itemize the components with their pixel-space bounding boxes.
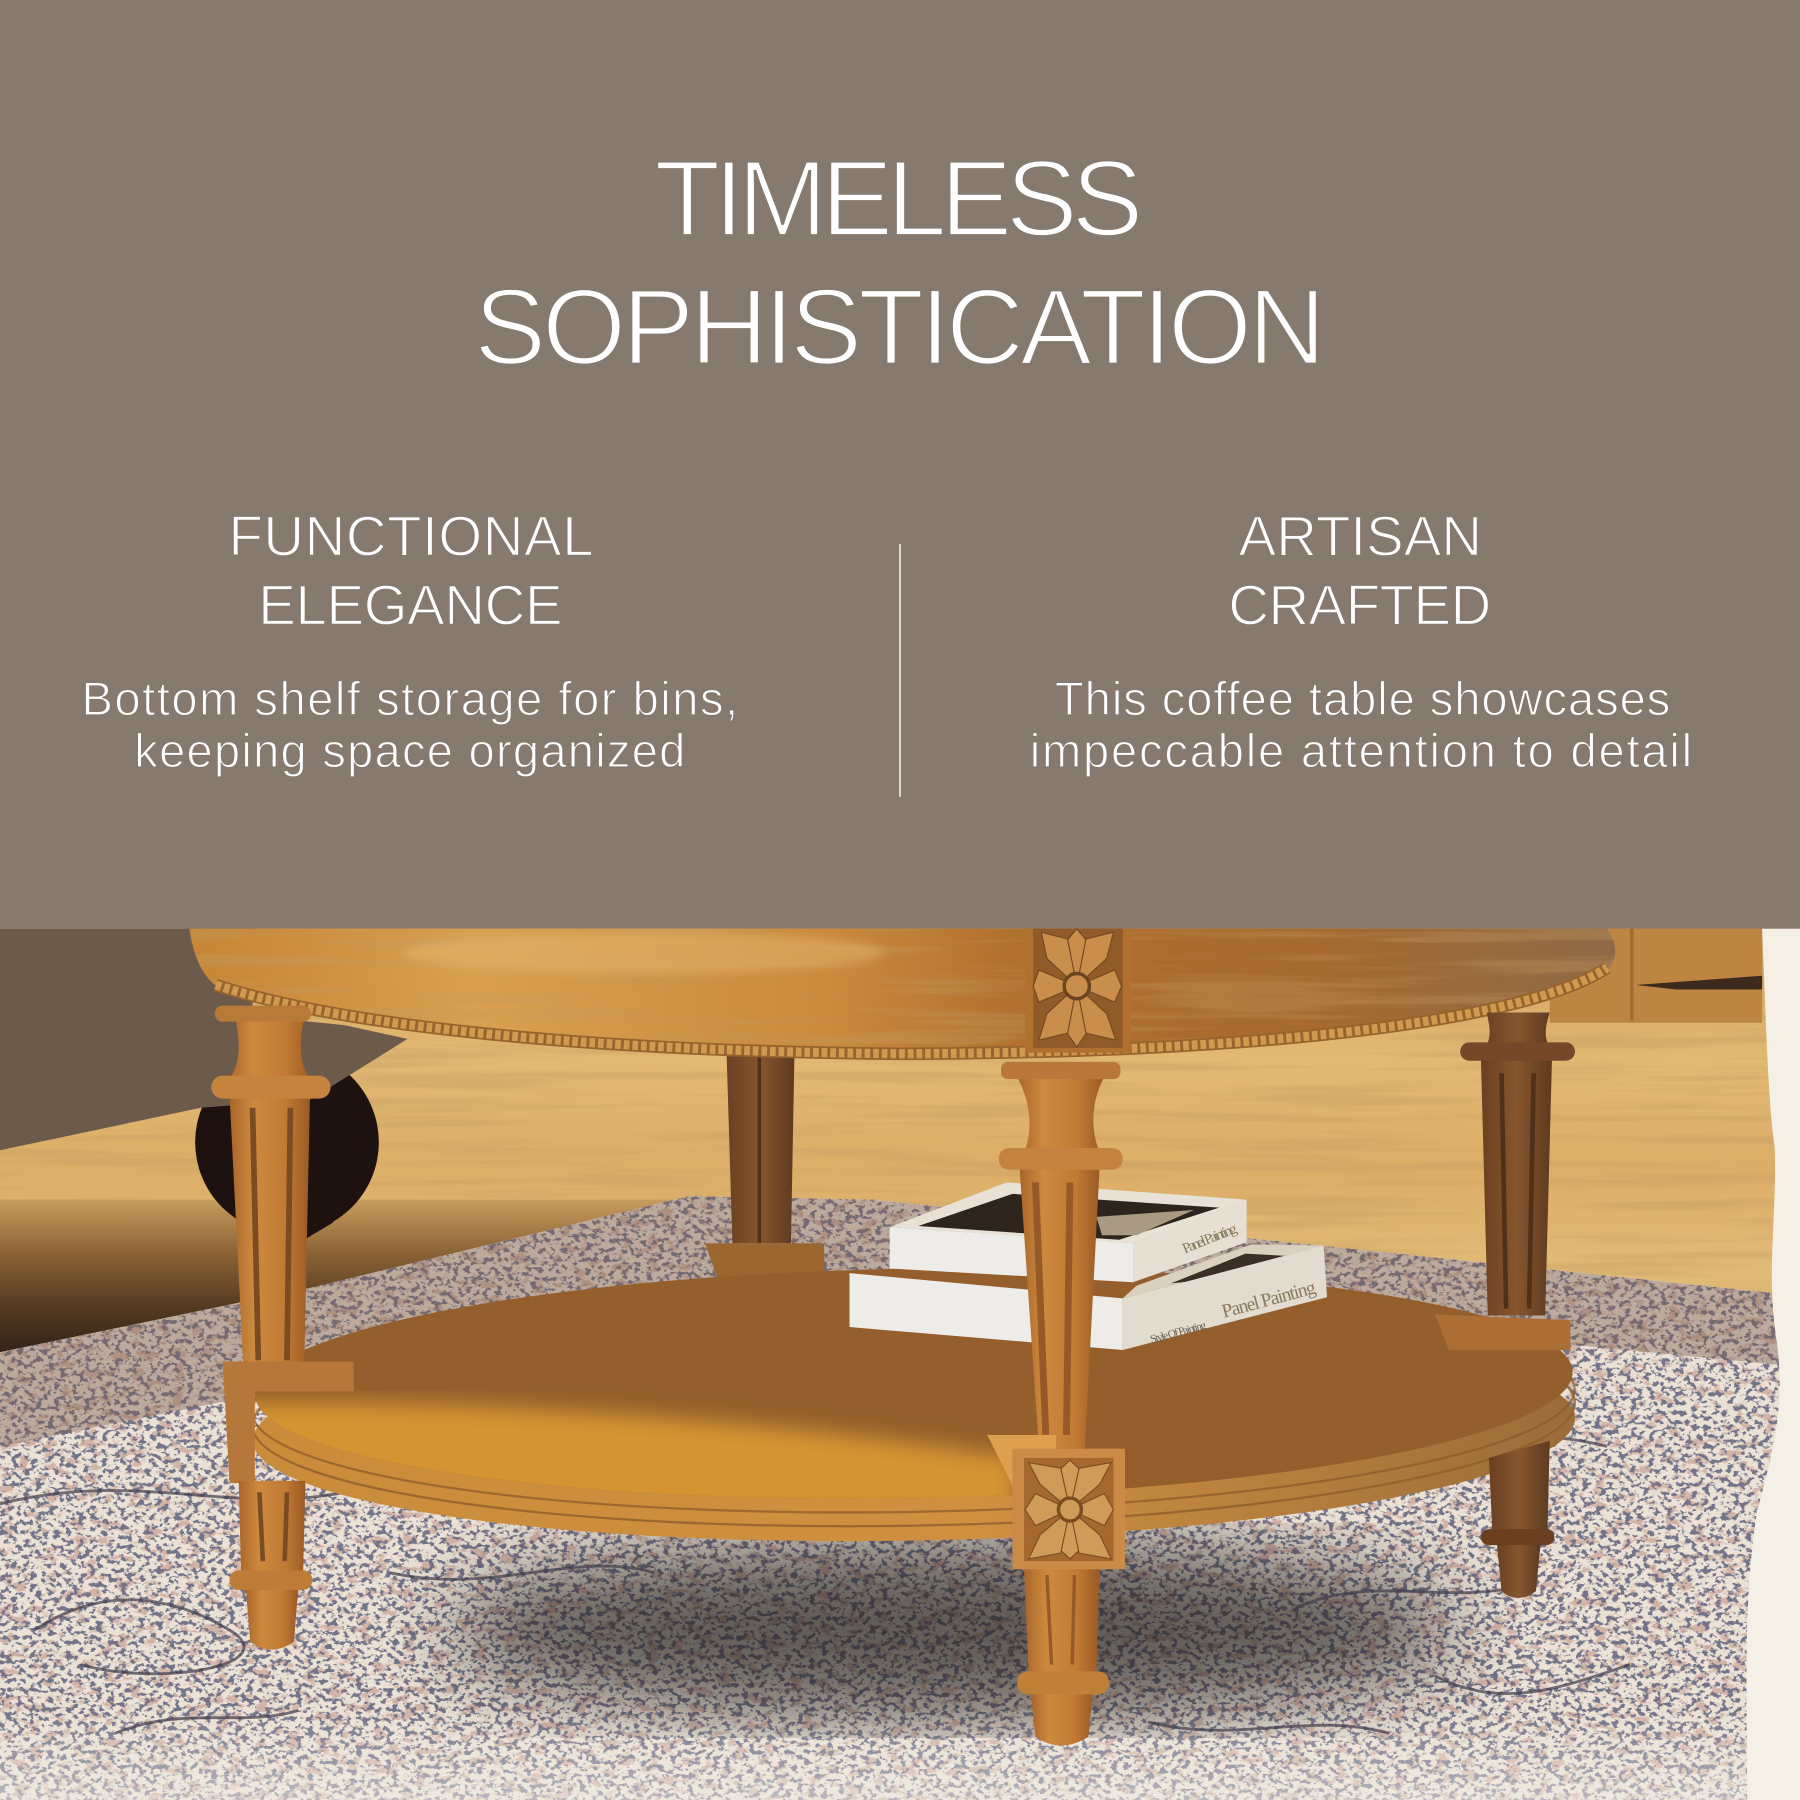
table top [189, 929, 1624, 1061]
center divider [899, 544, 901, 797]
text block: artisan crafted: CRAFTED [1228, 573, 1491, 636]
books [849, 1182, 1327, 1350]
shelf surface [255, 1268, 1573, 1499]
text block: artisan crafted: This coffee table showcases [1055, 672, 1670, 725]
carved panel: table top [1025, 929, 1131, 1053]
lower book: Panel Painting [1220, 1277, 1318, 1323]
upper book [890, 1182, 1247, 1282]
lower book: Style Of Painting [1149, 1319, 1208, 1346]
white pedestal [1746, 929, 1800, 1800]
upper book: Panel Painting [1180, 1221, 1240, 1257]
photo: coffee table scene [0, 929, 1800, 1800]
lower book [849, 1244, 1327, 1350]
title [474, 137, 1326, 387]
text block: functional elegance: Bottom shelf storage for bins, [82, 672, 738, 725]
panel: taupe heading background [0, 0, 1800, 929]
right leg [1435, 1012, 1575, 1598]
text block: artisan crafted [1030, 505, 1692, 777]
sofa [0, 929, 408, 1240]
text block: functional elegance: FUNCTIONAL [228, 505, 593, 568]
text block: artisan crafted: ARTISAN [1239, 505, 1482, 568]
title: SOPHISTICATION [474, 266, 1326, 387]
left leg [211, 1006, 354, 1650]
carved panel: shelf block [1012, 1449, 1125, 1569]
text block: functional elegance: keeping space organized [134, 724, 685, 777]
shelf rim [250, 1278, 1577, 1552]
title: TIMELESS [654, 137, 1143, 258]
rug [0, 1194, 1800, 1800]
front center leg [987, 1062, 1123, 1745]
rear cabinet [1550, 929, 1762, 1023]
lower shelf [230, 1257, 1584, 1552]
text block: functional elegance [82, 505, 738, 777]
text block: functional elegance: ELEGANCE [258, 573, 562, 636]
wood floor [0, 929, 1800, 1365]
text block: artisan crafted: impeccable attention to detail [1030, 724, 1692, 777]
rope trim [216, 968, 1607, 1054]
back leg [705, 1056, 824, 1278]
